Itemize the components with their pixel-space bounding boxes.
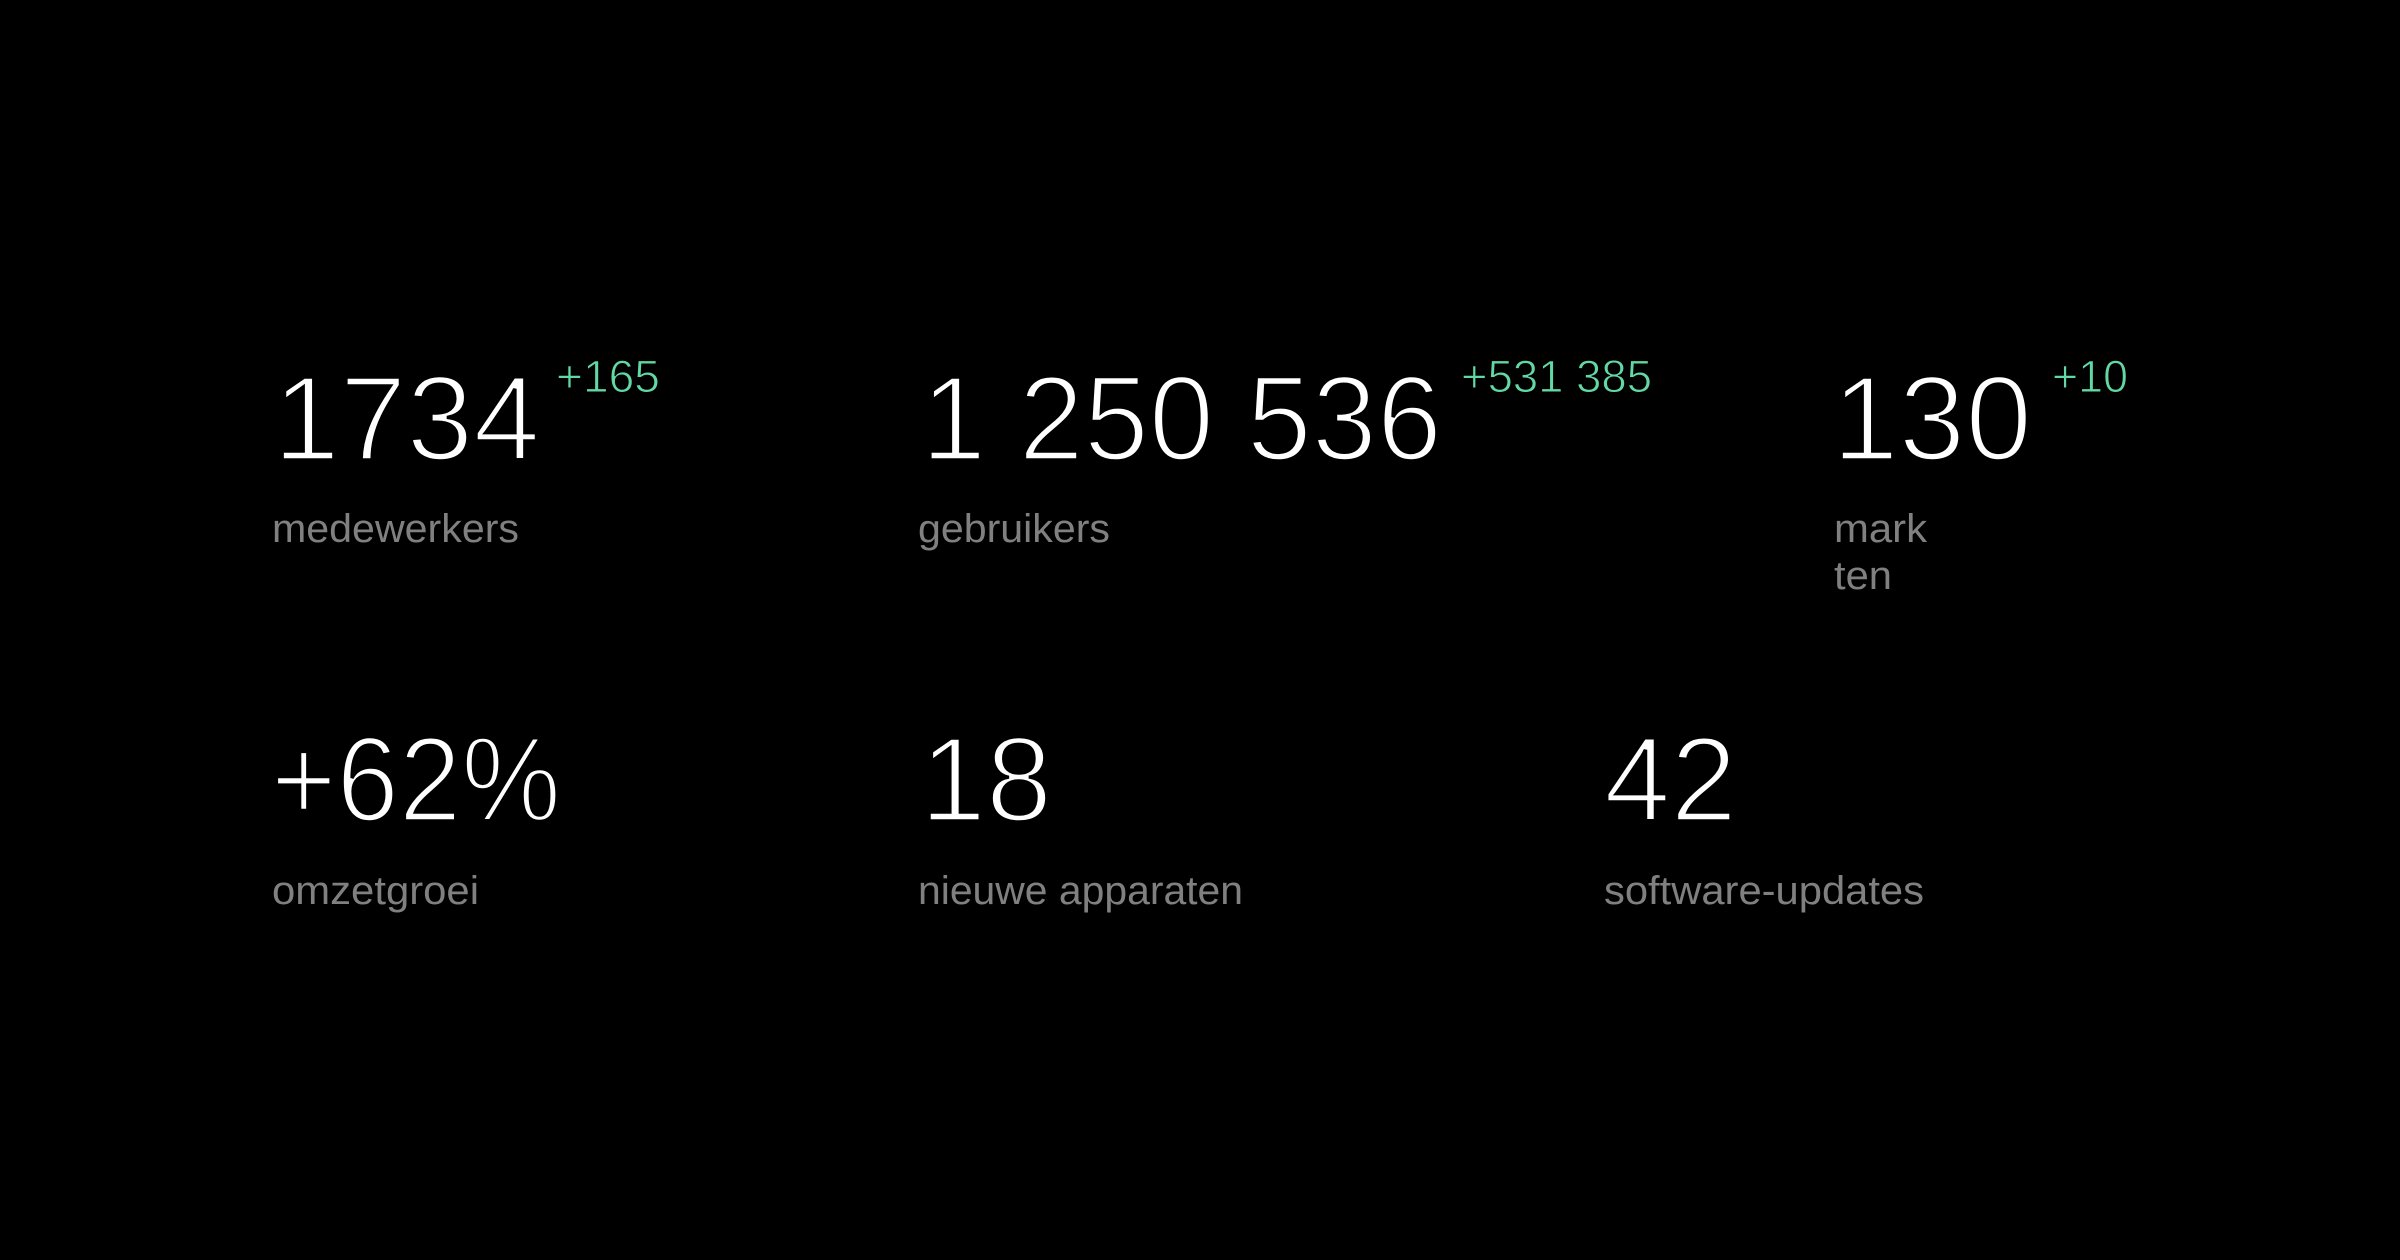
stat: software-updates: 42 bbox=[1604, 711, 1737, 847]
stat: markten: ten bbox=[1834, 554, 1892, 598]
stat: markten bbox=[1832, 350, 2128, 598]
stat: omzetgroei bbox=[271, 711, 561, 913]
stat: software-updates: software-updates bbox=[1604, 869, 1924, 913]
stat: gebruikers: 1 250 536 bbox=[921, 350, 1442, 486]
stat: nieuwe apparaten: 18 bbox=[920, 711, 1052, 847]
stat: medewerkers: +165 bbox=[556, 351, 660, 402]
stat: markten: +10 bbox=[2052, 351, 2128, 402]
stat: nieuwe apparaten: nieuwe apparaten bbox=[918, 869, 1243, 913]
stat: gebruikers: +531 385 bbox=[1461, 351, 1652, 402]
stat: medewerkers bbox=[272, 350, 660, 551]
stat: medewerkers: 1734 bbox=[273, 350, 540, 486]
stat: gebruikers: gebruikers bbox=[918, 507, 1110, 551]
stat: gebruikers bbox=[918, 350, 1652, 551]
stat: markten: mark bbox=[1834, 507, 1928, 551]
stat: medewerkers: medewerkers bbox=[272, 507, 519, 551]
stat: omzetgroei: +62% bbox=[271, 711, 561, 847]
stat: software-updates bbox=[1604, 711, 1924, 913]
stat: omzetgroei: omzetgroei bbox=[272, 869, 479, 913]
stat: markten: 130 bbox=[1832, 350, 2032, 486]
stat: nieuwe apparaten bbox=[918, 711, 1243, 913]
